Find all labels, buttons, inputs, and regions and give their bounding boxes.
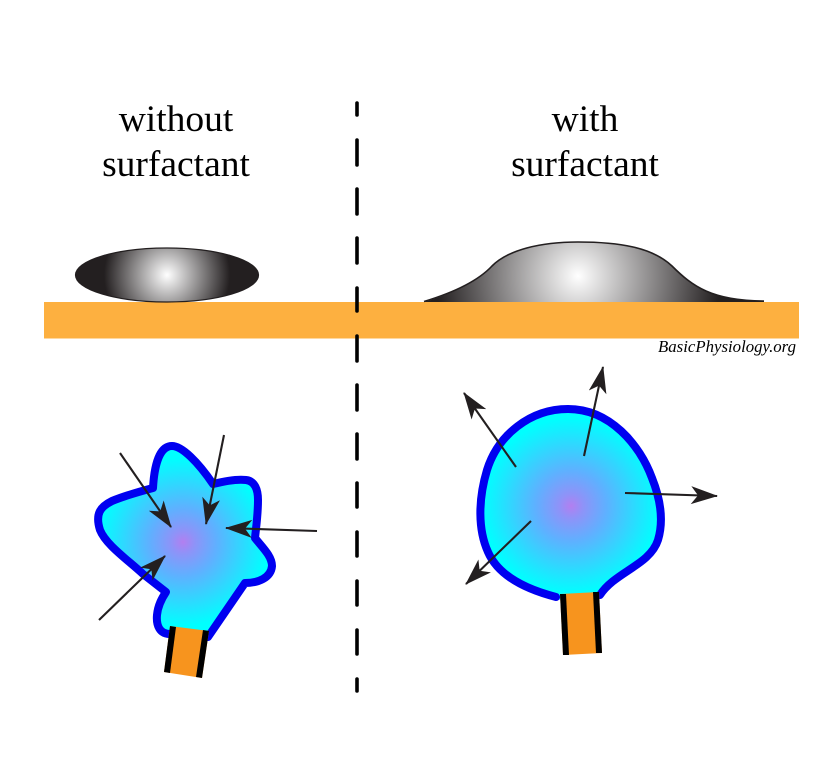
inflated alveolus wall: [480, 409, 661, 597]
inflated alveolus airway tube: [560, 592, 602, 655]
orange surface bar: [44, 302, 799, 338]
collapsed alveolus airway tube: [164, 626, 209, 678]
heading: with surfactant: surfactant: [511, 144, 659, 185]
inflated alveolus with surfactant: [480, 409, 661, 655]
droplet with surfactant: [424, 242, 764, 302]
inflated alveolus fill: [480, 409, 661, 600]
inward arrows: [99, 435, 317, 620]
heading: without surfactant: without: [119, 99, 234, 140]
dashed divider: [355, 103, 359, 691]
heading: without surfactant: [102, 99, 250, 185]
outward arrows: [464, 367, 717, 584]
collapsed alveolus outline: [98, 446, 272, 637]
watermark: BasicPhysiology.org: BasicPhysiology.org: [658, 337, 796, 356]
heading: with surfactant: with: [552, 99, 619, 140]
heading: with surfactant: [511, 99, 659, 185]
droplet without surfactant: [76, 248, 258, 302]
collapsed alveolus without surfactant: [98, 446, 272, 678]
heading: without surfactant: surfactant: [102, 144, 250, 185]
